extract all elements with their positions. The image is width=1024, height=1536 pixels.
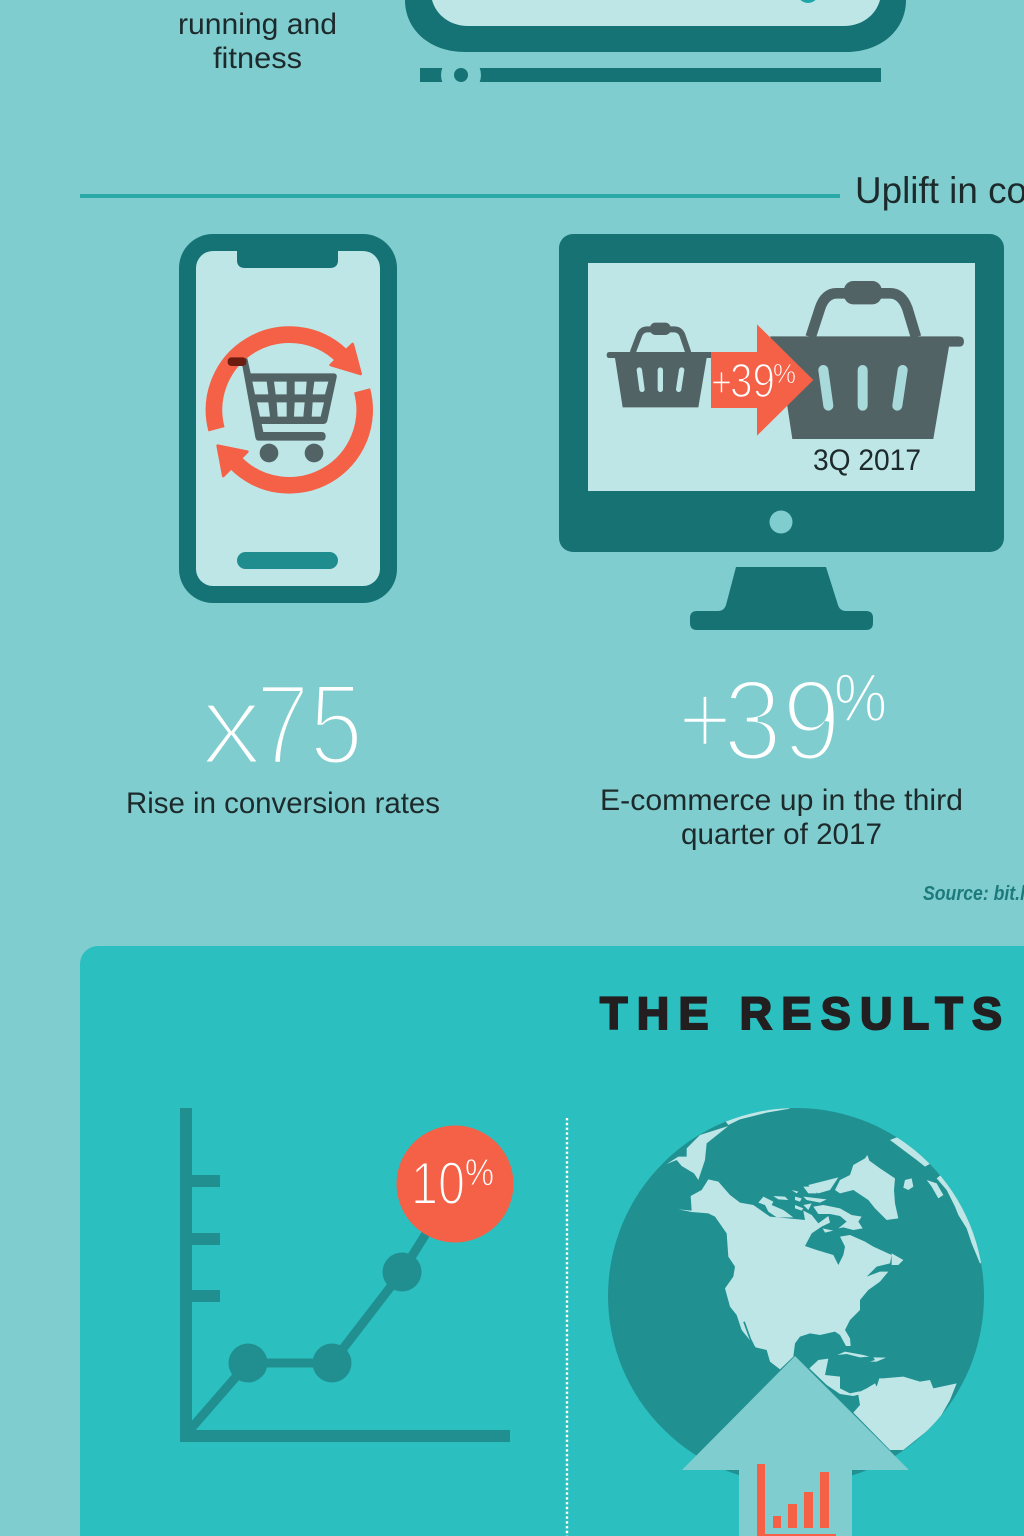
label: +39% on arrow: + xyxy=(711,358,732,407)
stat: x75 rise in conversion rates: x xyxy=(200,661,263,789)
icon: small and large baskets xyxy=(607,281,964,439)
stat: x75 rise in conversion rates: 75 xyxy=(256,661,363,789)
label: +39% on arrow xyxy=(711,355,796,408)
section heading: uplift in conversion: Uplift in co xyxy=(855,170,1024,211)
stat: +39% e-commerce: 39 xyxy=(723,657,841,785)
stat: +39% e-commerce: E-commerce up in the third xyxy=(600,784,963,817)
icon: laptop bottom edge xyxy=(405,0,906,95)
section heading: uplift in conversion xyxy=(80,170,1024,211)
stat: +39% e-commerce: quarter of 2017 xyxy=(681,818,882,851)
icon: circular arrows and cart xyxy=(214,335,365,485)
stat: +39% e-commerce: + xyxy=(678,661,732,778)
callout: 10%: % xyxy=(465,1152,494,1194)
stat: +39% e-commerce: % xyxy=(834,660,887,736)
callout: 10% xyxy=(396,1126,514,1242)
label: +39% on arrow: 39 xyxy=(730,355,775,408)
heading: the results: THE RESULTS xyxy=(600,988,1002,1039)
text: running and fitness xyxy=(178,8,337,75)
icon: globe with up arrow xyxy=(608,1103,993,1536)
panel: the results xyxy=(80,946,1024,1536)
label: 3Q 2017: 3Q 2017 xyxy=(813,444,921,477)
chart: line chart rising 10% xyxy=(186,1108,514,1436)
label: +39% on arrow: % xyxy=(773,358,796,389)
icon: smartphone with shopping cart xyxy=(179,234,397,603)
stat: +39% e-commerce xyxy=(600,657,963,851)
dotted divider xyxy=(566,1118,568,1536)
text: running and fitness: running and xyxy=(178,8,337,41)
stat: x75 rise in conversion rates xyxy=(126,661,440,820)
icon: desktop monitor with baskets xyxy=(559,234,1004,630)
callout: 10%: 10 xyxy=(411,1150,465,1217)
text: running and fitness: fitness xyxy=(213,42,302,75)
icon: orange bar chart xyxy=(757,1464,836,1536)
stat: x75 rise in conversion rates: Rise in conversion rates xyxy=(126,787,440,820)
